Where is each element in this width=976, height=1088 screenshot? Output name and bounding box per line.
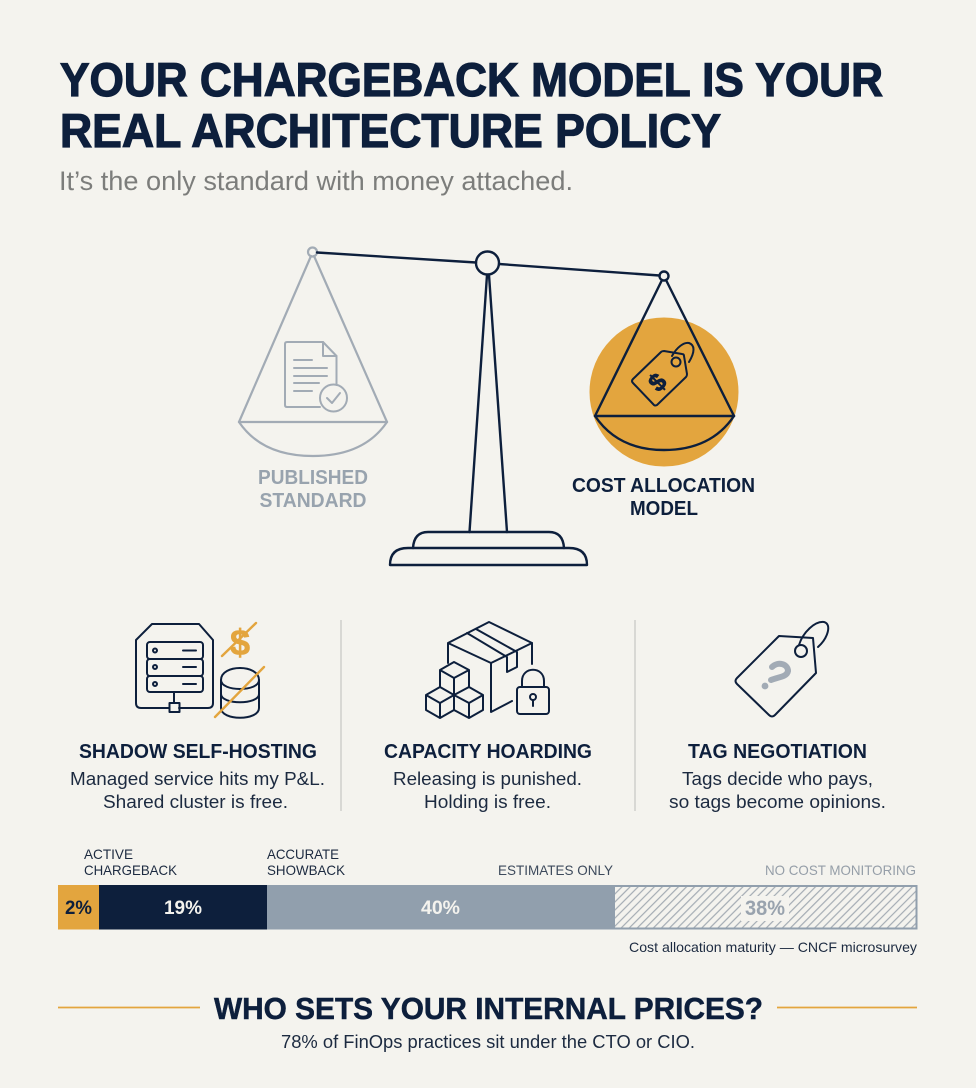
text: shadow self-hosting body	[70, 769, 325, 812]
beam and stand	[317, 252, 668, 565]
segment: 2%: 2%	[65, 898, 92, 919]
subtitle: It’s the only standard with money attached.	[59, 166, 573, 196]
label: published standard: PUBLISHED	[258, 467, 368, 489]
icon: document with check	[285, 342, 347, 412]
chart: cost allocation maturity stacked bar	[58, 846, 917, 955]
title: REAL ARCHITECTURE POLICY	[60, 104, 721, 157]
footer	[58, 992, 917, 1052]
dollar sign on tag: $	[643, 368, 673, 398]
segment labels	[84, 846, 916, 878]
panel: tag negotiation	[669, 622, 886, 812]
segment labels: CHARGEBACK	[84, 862, 178, 878]
text: tag negotiation body: so tags become opinions.	[669, 792, 886, 812]
segment: 40%: 40%	[421, 898, 460, 919]
footer text: 78% of FinOps practices sit under the CTO or CIO.	[281, 1032, 695, 1052]
label: published standard	[258, 467, 368, 512]
segment: 38%	[614, 886, 916, 928]
text: capacity hoarding body	[393, 769, 582, 812]
title: YOUR CHARGEBACK MODEL IS YOUR	[60, 53, 883, 106]
text: capacity hoarding body: Holding is free.	[424, 792, 551, 812]
icon: price tag with question mark	[736, 622, 828, 716]
segment labels: ACTIVE	[84, 846, 133, 862]
label: published standard: STANDARD	[260, 490, 366, 512]
panel: capacity hoarding	[384, 622, 592, 812]
right pan: cost allocation	[595, 280, 734, 450]
text: tag negotiation body	[669, 769, 886, 812]
segment labels: ESTIMATES ONLY	[498, 862, 614, 878]
balance scale illustration	[239, 248, 738, 565]
heading: shadow self-hosting: SHADOW SELF-HOSTING	[79, 740, 317, 763]
text: shadow self-hosting body: Managed service hits my P&L.	[70, 769, 325, 789]
segment labels: ACCURATE	[267, 846, 339, 862]
segment labels: NO COST MONITORING	[765, 862, 916, 878]
label: cost allocation model: MODEL	[630, 498, 698, 520]
segment: 38%: 38%	[745, 897, 785, 920]
highlight circle behind right pan	[590, 318, 738, 466]
heading: capacity hoarding: CAPACITY HOARDING	[384, 740, 592, 763]
title	[60, 53, 883, 157]
text: tag negotiation body: Tags decide who pays,	[682, 769, 873, 789]
segment: 19%: 19%	[164, 898, 202, 919]
segment labels: SHOWBACK	[267, 862, 346, 878]
text: capacity hoarding body: Releasing is punished.	[393, 769, 582, 789]
icon: box, cubes and padlock	[426, 622, 549, 718]
chart caption: Cost allocation maturity — CNCF microsurvey	[629, 939, 917, 955]
segment: 2%	[58, 885, 99, 930]
left pan: published standard	[239, 248, 387, 456]
footer heading: WHO SETS YOUR INTERNAL PRICES?	[214, 992, 763, 1026]
panel: shadow self-hosting	[70, 622, 325, 812]
text: shadow self-hosting body: Shared cluster is free.	[103, 792, 288, 812]
segment: 40%	[267, 885, 614, 930]
icon: server with crossed out dollar and database: $	[230, 622, 250, 663]
icon: price tag with dollar	[632, 343, 694, 406]
icon: server with crossed out dollar and database	[136, 622, 264, 718]
segment: 19%	[99, 885, 267, 930]
label: cost allocation model: COST ALLOCATION	[572, 475, 755, 497]
heading: tag negotiation: TAG NEGOTIATION	[688, 740, 867, 763]
label: cost allocation model	[572, 475, 755, 520]
